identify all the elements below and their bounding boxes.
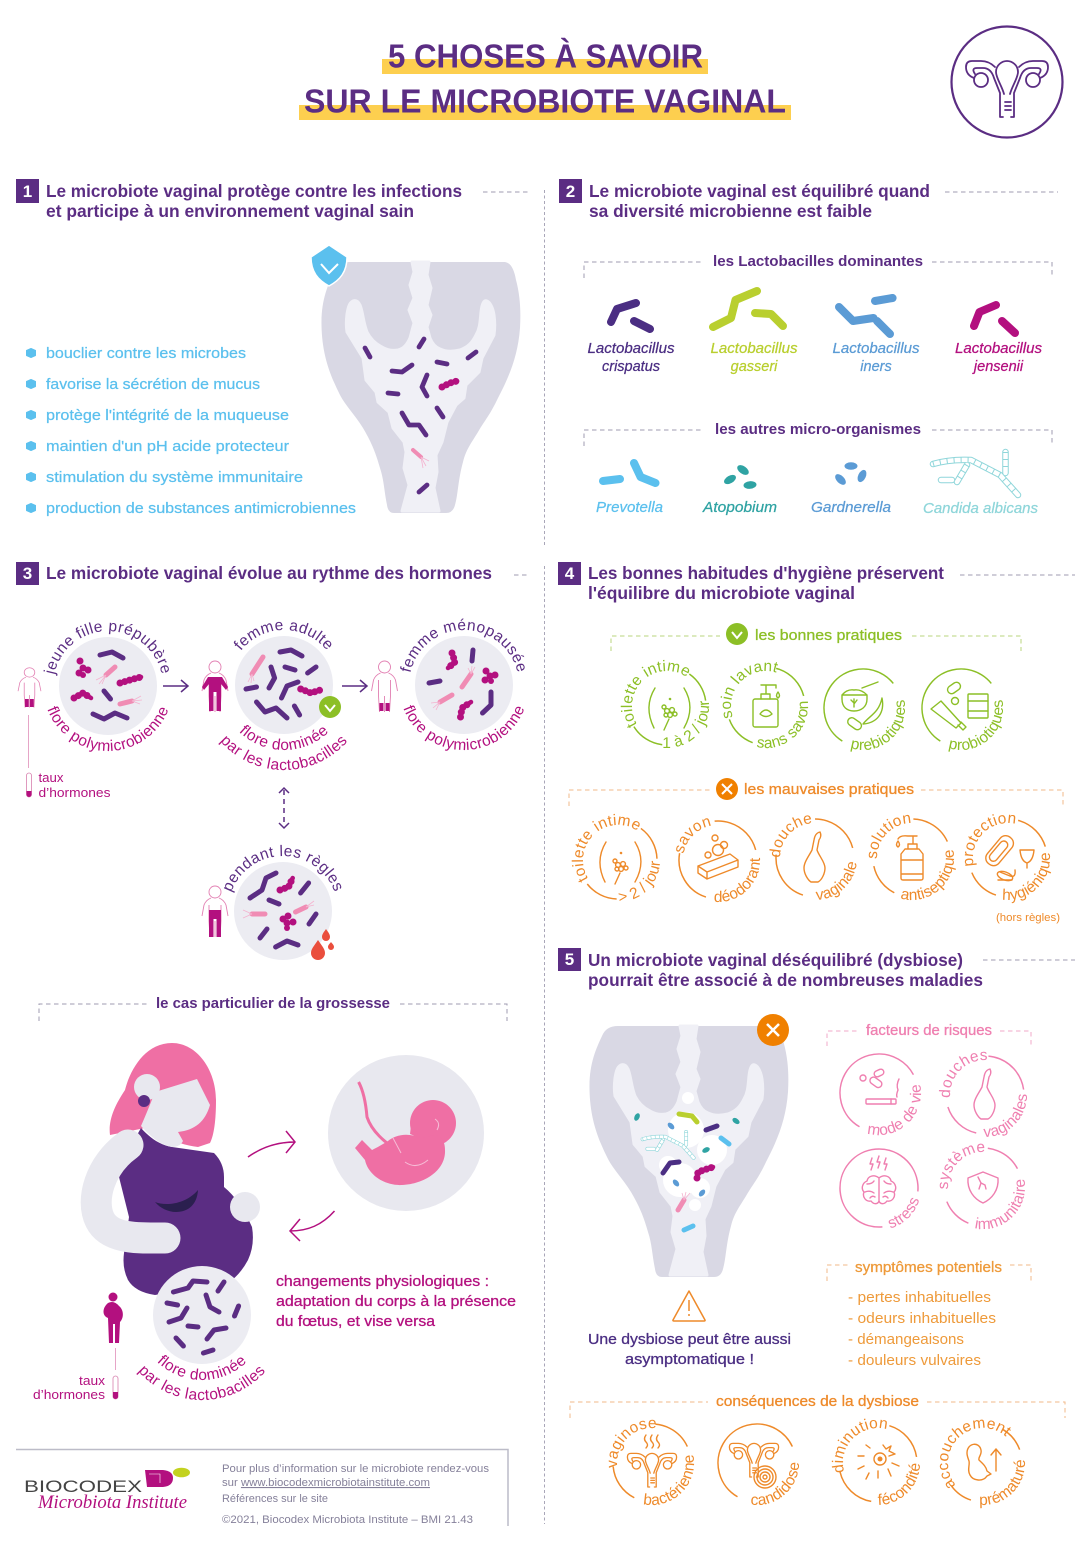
legend: hormone level xyxy=(33,1348,118,1402)
text: physiological changes: changements physiologiques : xyxy=(276,1273,489,1290)
footer xyxy=(16,1450,508,1526)
heading 2: Le microbiote vaginal est équilibré quand xyxy=(589,181,930,201)
heading 5 xyxy=(558,948,1075,990)
bacterium iners: iners xyxy=(860,359,892,375)
text: asymptomatic note xyxy=(588,1331,791,1368)
lactobacilli group: les Lactobacilles dominantes xyxy=(713,253,923,270)
vagina diagram with bacteria xyxy=(321,262,520,513)
circle: flora during pregnancy xyxy=(136,1266,264,1400)
circle: femme ménopausée: femme ménopausée xyxy=(400,618,525,672)
circle: femme ménopausée xyxy=(400,618,525,751)
figure: woman during period xyxy=(202,886,228,937)
risk factors heading: facteurs de risques xyxy=(866,1022,992,1039)
figure: older woman xyxy=(372,661,398,712)
legend: hormone level: d’hormones xyxy=(33,1387,106,1402)
icon: toilette intime plus de 2 par jour: > 2 / jour xyxy=(618,860,660,901)
bullet list: maintien d'un pH acide protecteur xyxy=(46,438,289,455)
logo: BIOCODEX xyxy=(24,1477,142,1496)
circle: femme adulte xyxy=(218,622,346,770)
symptoms: - démangeaisons xyxy=(848,1331,964,1348)
icon: accouchement premature: prématuré xyxy=(980,1460,1026,1508)
icon: douche vaginale: vaginale xyxy=(816,862,856,900)
heading 5: Un microbiote vaginal déséquilibré (dysbiose) xyxy=(588,950,963,970)
circle: flora during pregnancy: flore dominée xyxy=(158,1355,246,1380)
icon: stress xyxy=(839,1148,919,1228)
good practices heading: les bonnes pratiques xyxy=(755,627,902,644)
bad practices heading xyxy=(569,778,1063,806)
icon: douches vaginales: vaginales xyxy=(983,1094,1027,1137)
other micro-organisms group: les autres micro-organismes xyxy=(715,421,921,438)
bacterium crispatus xyxy=(588,303,674,375)
sub-panel: pregnancy: le cas particulier de la grossesse xyxy=(156,995,390,1012)
bullet list xyxy=(26,345,356,517)
icon: savon deodorant: déodorant xyxy=(714,858,760,902)
icon: systeme immunitaire: système xyxy=(940,1144,984,1189)
circle: femme adulte: par les lactobacilles xyxy=(218,736,346,770)
footer text: sur www.biocodexmicrobiotainstitute.com xyxy=(222,1477,430,1489)
footer text: Pour plus d’information sur le microbiote rendez-vous xyxy=(222,1463,490,1475)
logo xyxy=(24,1468,190,1513)
icon: warning triangle xyxy=(673,1291,705,1321)
heading 3: 3 xyxy=(23,564,32,583)
circle: jeune fille prépubère: flore polymicrobienne xyxy=(48,706,168,752)
icon: toilette intime plus de 2 par jour xyxy=(572,814,660,901)
icon: savon deodorant xyxy=(676,818,760,902)
bacterium Gardnerella: Gardnerella xyxy=(811,500,891,516)
icon: accouchement premature: accouchement xyxy=(940,1420,1011,1488)
panel 5: dysbiosis xyxy=(558,948,1075,1508)
bullet list: favorise la sécrétion de mucus xyxy=(46,376,260,393)
heading 4 xyxy=(558,562,1075,603)
icon: diminution fecondite: fécondité xyxy=(878,1464,920,1505)
bacterium jensenii: Lactobacillus xyxy=(955,341,1042,357)
icon: protection hygienique: protection xyxy=(964,814,1016,866)
bacterium gasseri: Lactobacillus xyxy=(710,341,798,357)
note: hors regles: (hors règles) xyxy=(996,912,1060,924)
icon: soin lavant sans savon: sans savon xyxy=(757,702,808,748)
bacterium iners: Lactobacillus xyxy=(832,341,920,357)
symptoms: - douleurs vulvaires xyxy=(848,1352,981,1369)
lactobacilli group xyxy=(584,253,1052,375)
bacterium gasseri: gasseri xyxy=(731,359,778,375)
icon: protection hygienique: hygiénique xyxy=(1003,853,1052,904)
icon: orange cross xyxy=(757,1014,789,1046)
text: asymptomatic note: asymptomatique ! xyxy=(625,1351,754,1368)
icon: protection hygienique xyxy=(964,814,1052,904)
bad practices heading: les mauvaises pratiques xyxy=(744,781,914,798)
icon: solution antiseptique: antiseptique xyxy=(901,850,956,900)
icon: shield xyxy=(311,245,347,286)
heading 5: 5 xyxy=(565,950,574,969)
bullet list: protège l'intégrité de la muqueuse xyxy=(46,407,289,424)
icon: soin lavant sans savon: soin lavant xyxy=(720,662,778,718)
symptoms: - odeurs inhabituelles xyxy=(848,1310,996,1327)
title: SUR LE MICROBIOTE VAGINAL xyxy=(304,82,786,120)
bacterium Atopobium xyxy=(702,463,777,516)
heading 4: 4 xyxy=(565,564,575,583)
icon: mode de vie xyxy=(839,1053,922,1136)
symptoms: symptômes potentiels xyxy=(855,1259,1002,1276)
bacterium jensenii: jensenii xyxy=(972,359,1024,375)
bacterium gasseri xyxy=(710,291,798,375)
heading 4: l'équilibre du microbiote vaginal xyxy=(588,583,855,603)
risk factors heading xyxy=(827,1022,1031,1046)
bacterium Gardnerella xyxy=(811,462,891,516)
icon: stress: stress xyxy=(888,1198,919,1228)
icon: toilette intime 1 a 2 par jour: toilette intime xyxy=(620,660,690,728)
fungus Candida albicans: Candida albicans xyxy=(923,501,1038,517)
fungus Candida albicans xyxy=(923,452,1038,517)
icon: uterus in circle xyxy=(952,26,1062,138)
legend: hormone level: d’hormones xyxy=(38,785,111,800)
icon: vaginose bacterienne: bactérienne xyxy=(644,1455,694,1506)
bullet list: bouclier contre les microbes xyxy=(46,345,246,362)
icon: green check xyxy=(319,696,341,718)
arrow: to foetus xyxy=(248,1131,295,1157)
illustration: pregnant woman xyxy=(96,1043,260,1295)
heading 2: sa diversité microbienne est faible xyxy=(589,201,872,221)
heading 2: 2 xyxy=(566,182,575,201)
icon: prebiotiques xyxy=(823,668,905,752)
title xyxy=(299,38,791,120)
legend: hormone level: taux xyxy=(38,770,64,785)
icon: solution antiseptique xyxy=(868,814,956,900)
icon: douche vaginale: douche xyxy=(769,815,812,857)
footer text xyxy=(222,1463,490,1526)
heading 2 xyxy=(559,179,1058,221)
icon: blood drops xyxy=(311,929,334,960)
circle: pendant les règles: pendant les règles xyxy=(224,844,342,893)
bullet list: stimulation du système immunitaire xyxy=(46,469,303,486)
panel 2: diversity xyxy=(559,179,1058,517)
panel 3: hormones xyxy=(16,562,526,1402)
arrow: double dashed xyxy=(279,788,289,828)
heading 3: Le microbiote vaginal évolue au rythme des hormones xyxy=(46,563,492,583)
circle: jeune fille prépubère: jeune fille prépubère xyxy=(44,622,169,676)
icon: soin lavant sans savon xyxy=(720,662,808,748)
icon: accouchement premature xyxy=(940,1420,1026,1508)
circle: flora during pregnancy: par les lactobacilles xyxy=(136,1366,264,1400)
icon: toilette intime 1 a 2 par jour xyxy=(620,660,710,748)
title: 5 CHOSES À SAVOIR xyxy=(388,38,703,74)
arrow: from foetus xyxy=(290,1211,334,1241)
heading 4: Les bonnes habitudes d'hygiène préservent xyxy=(588,563,944,583)
figure: pregnant silhouette xyxy=(104,1292,123,1343)
icon: systeme immunitaire xyxy=(940,1144,1025,1230)
symptoms xyxy=(827,1259,1031,1369)
heading 1: Le microbiote vaginal protège contre les infections xyxy=(46,181,462,201)
heading 1: 1 xyxy=(23,182,32,201)
arrow xyxy=(342,680,367,692)
icon: savon deodorant: savon xyxy=(676,818,711,853)
text: physiological changes: du fœtus, et vise versa xyxy=(276,1313,436,1330)
icon: solution antiseptique: solution xyxy=(868,814,910,858)
consequences heading: conséquences de la dysbiose xyxy=(716,1393,919,1410)
figure: child xyxy=(18,668,41,708)
icon: mode de vie: mode de vie xyxy=(868,1085,922,1136)
icon: candidose: candidose xyxy=(751,1462,799,1505)
footer text: ©2021, Biocodex Microbiota Institute – BMI 21.43 xyxy=(222,1514,473,1526)
legend: hormone level xyxy=(26,715,111,800)
bacterium Prevotella: Prevotella xyxy=(596,500,663,516)
icon: systeme immunitaire: immunitaire xyxy=(975,1180,1025,1230)
heading 5: pourrait être associé à de nombreuses maladies xyxy=(588,970,983,990)
bullet list: production de substances antimicrobiennes xyxy=(46,500,356,517)
text: asymptomatic note: Une dysbiose peut être aussi xyxy=(588,1331,791,1348)
icon: douche vaginale xyxy=(769,815,856,900)
symptoms: - pertes inhabituelles xyxy=(848,1289,991,1306)
heading 1: et participe à un environnement vaginal sain xyxy=(46,201,414,221)
bacterium Atopobium: Atopobium xyxy=(702,500,777,516)
arrow xyxy=(163,680,188,692)
circle: jeune fille prépubère xyxy=(44,622,169,752)
icon: toilette intime plus de 2 par jour: toilette intime xyxy=(572,814,640,883)
other micro-organisms group xyxy=(584,421,1052,517)
icon: candidose xyxy=(717,1423,799,1505)
icon: probiotiques: probiotiques xyxy=(948,700,1003,752)
circle: femme ménopausée: flore polymicrobienne xyxy=(404,705,524,751)
logo: Microbiota Institute xyxy=(37,1492,187,1513)
footer text: Références sur le site xyxy=(222,1493,328,1505)
bacterium crispatus: Lactobacillus xyxy=(588,341,674,357)
circle: femme adulte: femme adulte xyxy=(234,622,332,650)
panel 1: protection xyxy=(16,179,530,517)
bacterium Prevotella xyxy=(596,463,663,516)
vagina diagram with dysbiosis xyxy=(589,1026,788,1277)
icon: prebiotiques: prebiotiques xyxy=(850,700,905,752)
sub-panel: pregnancy xyxy=(33,995,516,1402)
panel: section divider xyxy=(544,190,546,1524)
icon: toilette intime 1 a 2 par jour: 1 à 2 / jour xyxy=(663,701,710,748)
panel 4: hygiene xyxy=(558,562,1075,924)
icon: vaginose bacterienne xyxy=(608,1420,694,1506)
icon: diminution fecondite: diminution xyxy=(832,1418,887,1472)
text: physiological changes xyxy=(276,1273,516,1330)
heading 1 xyxy=(16,179,530,221)
good practices heading xyxy=(611,623,1021,651)
text: physiological changes: adaptation du corps à la présence xyxy=(276,1293,516,1310)
figure: adult woman xyxy=(202,661,228,712)
bacterium iners xyxy=(832,298,920,375)
icon: vaginose bacterienne: vaginose xyxy=(608,1420,656,1468)
legend: hormone level: taux xyxy=(79,1373,106,1388)
icon: probiotiques xyxy=(921,668,1003,752)
icon: diminution fecondite xyxy=(832,1418,920,1505)
icon: douches vaginales: douches xyxy=(938,1052,987,1098)
circle: femme adulte: flore dominée xyxy=(240,725,328,750)
bacterium jensenii xyxy=(955,305,1042,375)
bacterium crispatus: crispatus xyxy=(602,359,660,375)
icon: douches vaginales xyxy=(938,1052,1027,1137)
circle: foetus xyxy=(328,1055,484,1211)
consequences heading xyxy=(570,1393,1065,1418)
circle: pendant les règles xyxy=(224,844,342,960)
